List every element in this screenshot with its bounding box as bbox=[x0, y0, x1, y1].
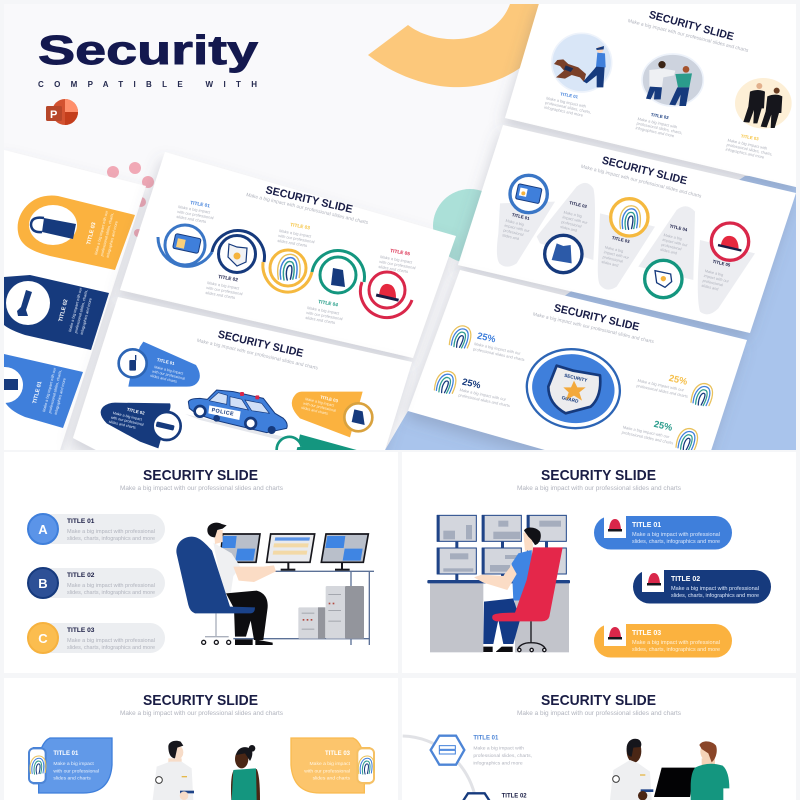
card 01 blue: with our professional bbox=[53, 768, 99, 774]
hexagon step 01: infographics and more bbox=[473, 760, 523, 766]
slide heading: SECURITY SLIDE bbox=[264, 184, 354, 216]
slide heading: Make a big impact with our professional slides and charts bbox=[627, 18, 750, 54]
slide heading: SECURITY SLIDE bbox=[217, 329, 304, 360]
slide heading: SECURITY SLIDE bbox=[553, 302, 640, 334]
timeline step 01: TITLE 01 bbox=[190, 200, 211, 209]
timeline step 03: TITLE 03 bbox=[290, 222, 311, 231]
main title: Security bbox=[38, 27, 258, 73]
hexagon step 01: professional slides, charts, bbox=[473, 753, 532, 759]
slide heading bbox=[120, 692, 283, 717]
stat: 25% green: 25% bbox=[653, 419, 674, 433]
callout 02 navy: slides and charts bbox=[108, 420, 136, 430]
block: title 01: Make a big impact with bbox=[546, 95, 586, 109]
column 04: slides and bbox=[660, 248, 677, 255]
list item B: slides, charts, infographics and more bbox=[67, 590, 155, 596]
subtitle: compatible with: COMPATIBLE WITH bbox=[38, 80, 257, 89]
curved connector bbox=[403, 736, 476, 800]
stat: 25% blue bbox=[449, 323, 526, 362]
column 03: Make a big bbox=[604, 245, 624, 254]
callout 04 green bbox=[277, 434, 357, 450]
band 03 orange bbox=[18, 196, 135, 270]
column 01 bbox=[497, 175, 555, 267]
timeline step 03 bbox=[263, 222, 316, 292]
column 04: Make a big bbox=[663, 233, 682, 241]
list item B: B bbox=[38, 576, 48, 591]
decorative orange arc bbox=[368, 4, 540, 87]
timeline step 04 bbox=[305, 251, 364, 326]
timeline step 02 bbox=[205, 231, 264, 301]
column 04: impact with our bbox=[662, 238, 689, 248]
callout 02 navy: TITLE 02 bbox=[126, 407, 146, 416]
alert pill 01 blue: TITLE 01 bbox=[632, 522, 661, 529]
block: title 03: professional slides, charts, bbox=[726, 142, 773, 157]
hexagon step 01: TITLE 01 bbox=[473, 736, 499, 742]
panel: slide with five tapered columns bbox=[458, 125, 796, 333]
block: title 02: TITLE 02 bbox=[650, 112, 670, 120]
block: title 02: Make a big impact with bbox=[637, 116, 678, 129]
card 03 orange: with our professional bbox=[304, 768, 350, 774]
timeline step 03: Make a big impact bbox=[279, 228, 313, 239]
person in green top bbox=[231, 745, 260, 800]
card 01 blue: slides and charts bbox=[53, 776, 91, 782]
band 03 orange: professional slides, charts, bbox=[100, 212, 115, 257]
slide heading: Make a big impact with our professional slides and charts bbox=[120, 710, 283, 717]
slide heading bbox=[517, 467, 681, 492]
stat: 25% navy: 25% bbox=[461, 377, 482, 391]
stat: 25% green: professional slides and charts bbox=[621, 430, 674, 445]
slide heading: Make a big impact with our professional slides and charts bbox=[196, 338, 319, 372]
illustration: police car: POLICE bbox=[211, 407, 235, 418]
column 02: professional bbox=[561, 220, 582, 229]
shield emblem: GUARD bbox=[561, 395, 579, 404]
timeline step 02: Make a big impact bbox=[207, 280, 241, 291]
slide heading: Make a big impact with our professional slides and charts bbox=[517, 485, 681, 492]
band 01 blue: professional slides, charts, bbox=[48, 369, 63, 414]
slide heading: SECURITY SLIDE bbox=[648, 9, 735, 43]
timeline step 03: slides and charts bbox=[277, 238, 308, 248]
light blue background block bbox=[385, 176, 796, 450]
column 02: slides and bbox=[560, 225, 577, 233]
card 03 orange: Make a big impact bbox=[310, 761, 351, 767]
slide heading bbox=[517, 692, 681, 717]
stat: 25% navy: Make a big impact with our bbox=[459, 387, 507, 402]
guard figure bbox=[610, 739, 653, 800]
column 03 bbox=[598, 199, 655, 290]
band 01 blue: Make a big impact with our bbox=[42, 367, 57, 412]
list item C: C bbox=[38, 631, 48, 646]
timeline step 02: with our professional bbox=[206, 285, 243, 296]
illustration: two people talking bbox=[642, 54, 703, 106]
column 05: TITLE 05 bbox=[712, 259, 731, 268]
stat: 25% yellow: 25% bbox=[668, 373, 689, 387]
illustration: guard with dog bbox=[552, 33, 612, 92]
timeline step 05: slides and charts bbox=[378, 264, 409, 274]
alert pill 02 navy: slides, charts, infographics and more bbox=[671, 593, 759, 599]
panel: police car slide bbox=[73, 297, 412, 450]
band 03 orange: infographics and more bbox=[106, 221, 119, 258]
callout 02 navy: with our professional bbox=[110, 415, 144, 427]
panel: slide with operator and six monitors bbox=[402, 452, 796, 673]
slide heading: SECURITY SLIDE bbox=[143, 692, 258, 709]
callout 03 orange bbox=[292, 392, 372, 437]
timeline step 03: with our professional bbox=[278, 233, 315, 244]
stat: 25% navy: professional slides and charts bbox=[458, 392, 510, 408]
callout 01 blue bbox=[119, 342, 200, 387]
slide heading: SECURITY SLIDE bbox=[601, 155, 688, 187]
list item A: TITLE 01 bbox=[67, 518, 95, 525]
stat: 25% yellow bbox=[636, 374, 714, 406]
column 01: TITLE 01 bbox=[511, 212, 531, 221]
illustration: police car bbox=[185, 390, 287, 440]
card 01 blue: Make a big impact bbox=[53, 761, 94, 767]
callout 03 orange: Make a big impact bbox=[305, 397, 335, 408]
callout 03 orange: with our professional bbox=[303, 401, 337, 413]
slide heading bbox=[120, 467, 283, 492]
card 03 orange: slides and charts bbox=[313, 776, 351, 782]
column 04: professional bbox=[661, 243, 682, 251]
column 05: professional bbox=[702, 279, 723, 287]
stat: 25% yellow: professional slides and charts bbox=[636, 383, 688, 399]
icon: PowerPoint bbox=[46, 99, 78, 125]
block: title 01: TITLE 01 bbox=[560, 91, 579, 100]
alert pill 02 navy bbox=[633, 565, 771, 604]
callout 01 blue: TITLE 01 bbox=[156, 357, 176, 366]
band 01 blue: TITLE 01 bbox=[32, 381, 43, 404]
slide heading: Make a big impact with our professional slides and charts bbox=[532, 311, 655, 345]
timeline step 01: Make a big impact bbox=[178, 204, 212, 215]
column 05: impact with our bbox=[703, 274, 730, 284]
illustration: operator at three monitors bbox=[176, 523, 374, 645]
band 03 orange: TITLE 03 bbox=[86, 222, 97, 245]
list item C: slides, charts, infographics and more bbox=[67, 645, 155, 651]
list item C: TITLE 03 bbox=[67, 627, 95, 634]
stat: 25% green bbox=[622, 420, 698, 450]
alert pill 02 navy: Make a big impact with professional bbox=[671, 586, 759, 592]
list item A bbox=[28, 514, 165, 544]
column 02: Make a big bbox=[563, 210, 582, 219]
card 01 blue: TITLE 01 bbox=[53, 751, 79, 757]
panel: top right slide with illustrated circles bbox=[505, 0, 800, 188]
list item A: slides, charts, infographics and more bbox=[67, 536, 155, 542]
band 02 navy bbox=[4, 275, 109, 350]
column 02: impact with our bbox=[562, 215, 589, 225]
timeline step 05 bbox=[360, 248, 417, 318]
panel: left slide with vertical bands bbox=[4, 176, 146, 450]
illustration: operator at monitor wall bbox=[427, 515, 570, 652]
block: title 01: professional slides, charts, bbox=[545, 100, 592, 115]
decorative pink dots bbox=[107, 162, 154, 237]
timeline step 02: TITLE 02 bbox=[218, 274, 239, 283]
hexagon step 02 bbox=[459, 793, 527, 800]
timeline step 02: slides and charts bbox=[205, 290, 236, 300]
stat: 25% navy bbox=[434, 369, 512, 408]
callout 02 navy: Make a big impact bbox=[112, 411, 142, 422]
timeline step 04: Make a big impact bbox=[307, 305, 341, 316]
block: title 03: infographics and more bbox=[725, 147, 766, 160]
alert pill 02 navy: TITLE 02 bbox=[671, 576, 700, 583]
timeline step 05: TITLE 05 bbox=[390, 248, 411, 257]
illustration: two suited guards bbox=[735, 78, 792, 129]
list item B bbox=[28, 568, 165, 598]
stat: 25% blue: 25% bbox=[476, 331, 497, 345]
column 01: professional bbox=[503, 228, 524, 237]
block: title 03 bbox=[726, 134, 772, 158]
panel: slide with two people and side cards bbox=[4, 678, 398, 800]
column 01: impact with our bbox=[504, 224, 531, 233]
block: title 03: Make a big impact with bbox=[727, 137, 768, 151]
slide heading: SECURITY SLIDE bbox=[541, 692, 656, 709]
list item B: TITLE 02 bbox=[67, 572, 95, 579]
alert pill 01 blue: slides, charts, infographics and more bbox=[632, 539, 720, 545]
shield emblem: SECURITY bbox=[564, 373, 589, 383]
alert pill 01 blue: Make a big impact with professional bbox=[632, 532, 720, 538]
card 03 orange: TITLE 03 bbox=[325, 751, 351, 757]
timeline step 04: with our professional bbox=[306, 310, 343, 321]
decorative mint circle bbox=[433, 189, 507, 263]
alert pill 03 orange: TITLE 03 bbox=[632, 630, 661, 637]
alert pill 03 orange bbox=[594, 619, 732, 658]
list item A: Make a big impact with professional bbox=[67, 529, 155, 535]
panel: percentage slide with shield bbox=[408, 270, 747, 460]
band 03 orange: Make a big impact with our bbox=[94, 210, 109, 255]
column 05 bbox=[698, 223, 755, 314]
slide heading: Make a big impact with our professional slides and charts bbox=[517, 710, 681, 717]
slide heading: SECURITY SLIDE bbox=[143, 467, 258, 484]
timeline step 05: with our professional bbox=[379, 259, 416, 270]
slide heading: SECURITY SLIDE bbox=[541, 467, 656, 484]
column 03: TITLE 03 bbox=[611, 235, 631, 244]
alert pill 01 blue bbox=[594, 511, 732, 550]
stat: 25% blue: professional slides and charts bbox=[473, 346, 525, 362]
callout 01 blue: slides and charts bbox=[150, 374, 178, 384]
alert pill 03 orange: slides, charts, infographics and more bbox=[632, 647, 720, 653]
card 01 blue bbox=[29, 738, 112, 793]
alert pill 03 orange: Make a big impact with professional bbox=[632, 640, 720, 646]
stat: 25% blue: Make a big impact with our bbox=[474, 341, 522, 356]
slide heading: Make a big impact with our professional slides and charts bbox=[580, 164, 703, 200]
column 03: professional bbox=[602, 255, 623, 264]
block: title 03: TITLE 03 bbox=[740, 133, 760, 142]
panel: slide with operator and three monitors bbox=[4, 452, 398, 673]
callout 03 orange: TITLE 03 bbox=[320, 394, 339, 403]
timeline step 01: slides and charts bbox=[176, 214, 207, 224]
timeline step 04: slides and charts bbox=[305, 315, 336, 325]
band 01 blue bbox=[0, 354, 83, 428]
stat: 25% yellow: Make a big impact with our bbox=[637, 378, 685, 393]
hexagon step 02: TITLE 02 bbox=[502, 794, 527, 800]
timeline step 05: Make a big impact bbox=[380, 254, 414, 265]
callout 01 blue: Make a big impact bbox=[154, 365, 184, 376]
block: title 02: professional slides, charts, bbox=[636, 121, 683, 135]
column 03: impact with our bbox=[603, 250, 630, 260]
hexagon step 01 bbox=[431, 736, 532, 766]
list item C: Make a big impact with professional bbox=[67, 638, 155, 644]
list item A: A bbox=[38, 522, 48, 537]
list item C bbox=[28, 623, 165, 653]
block: title 01: infographics and more bbox=[544, 105, 584, 118]
customer figure bbox=[691, 741, 729, 800]
column 01: slides and bbox=[502, 233, 519, 241]
slide heading: Make a big impact with our professional slides and charts bbox=[120, 485, 283, 492]
timeline step 01: with our professional bbox=[177, 209, 214, 220]
column 05: Make a big bbox=[704, 269, 724, 277]
band 02 navy: TITLE 02 bbox=[58, 299, 69, 322]
hexagon step 01: Make a big impact with bbox=[473, 746, 524, 752]
column 03: slides and bbox=[601, 260, 619, 268]
band 02 navy: infographics and more bbox=[80, 298, 93, 335]
slide heading: Make a big impact with our professional slides and charts bbox=[246, 192, 369, 226]
column 01: Make a big bbox=[505, 219, 524, 227]
person with shield patch bbox=[153, 741, 194, 800]
column 04: TITLE 04 bbox=[669, 223, 688, 232]
callout 03 orange: slides and charts bbox=[301, 406, 329, 416]
stat: 25% green: Make a big impact with our bbox=[622, 424, 671, 439]
panel: winding timeline slide bbox=[120, 152, 456, 358]
callout 02 navy bbox=[101, 403, 181, 448]
band 02 navy: professional slides, charts, bbox=[74, 289, 89, 334]
column 02 bbox=[537, 183, 595, 273]
icon: PowerPoint: P bbox=[50, 109, 57, 121]
callout 01 blue: with our professional bbox=[152, 369, 186, 381]
column 05: slides and bbox=[701, 284, 719, 291]
block: title 01 bbox=[544, 92, 591, 116]
band 02 navy: Make a big impact with our bbox=[68, 287, 83, 332]
block: title 02: infographics and more bbox=[635, 125, 676, 138]
list item B: Make a big impact with professional bbox=[67, 583, 155, 589]
timeline step 04: TITLE 04 bbox=[318, 299, 339, 308]
hero panel background bbox=[4, 4, 796, 450]
computer monitor bbox=[654, 768, 695, 797]
column 02: TITLE 02 bbox=[569, 200, 588, 209]
timeline step 01 bbox=[158, 200, 215, 266]
shield emblem bbox=[526, 348, 622, 430]
column 04 bbox=[638, 206, 695, 298]
card 03 orange bbox=[291, 738, 374, 793]
block: title 02 bbox=[636, 113, 682, 138]
panel: slide with hexagon steps and monitor bbox=[402, 678, 796, 800]
band 01 blue: infographics and more bbox=[54, 378, 67, 415]
